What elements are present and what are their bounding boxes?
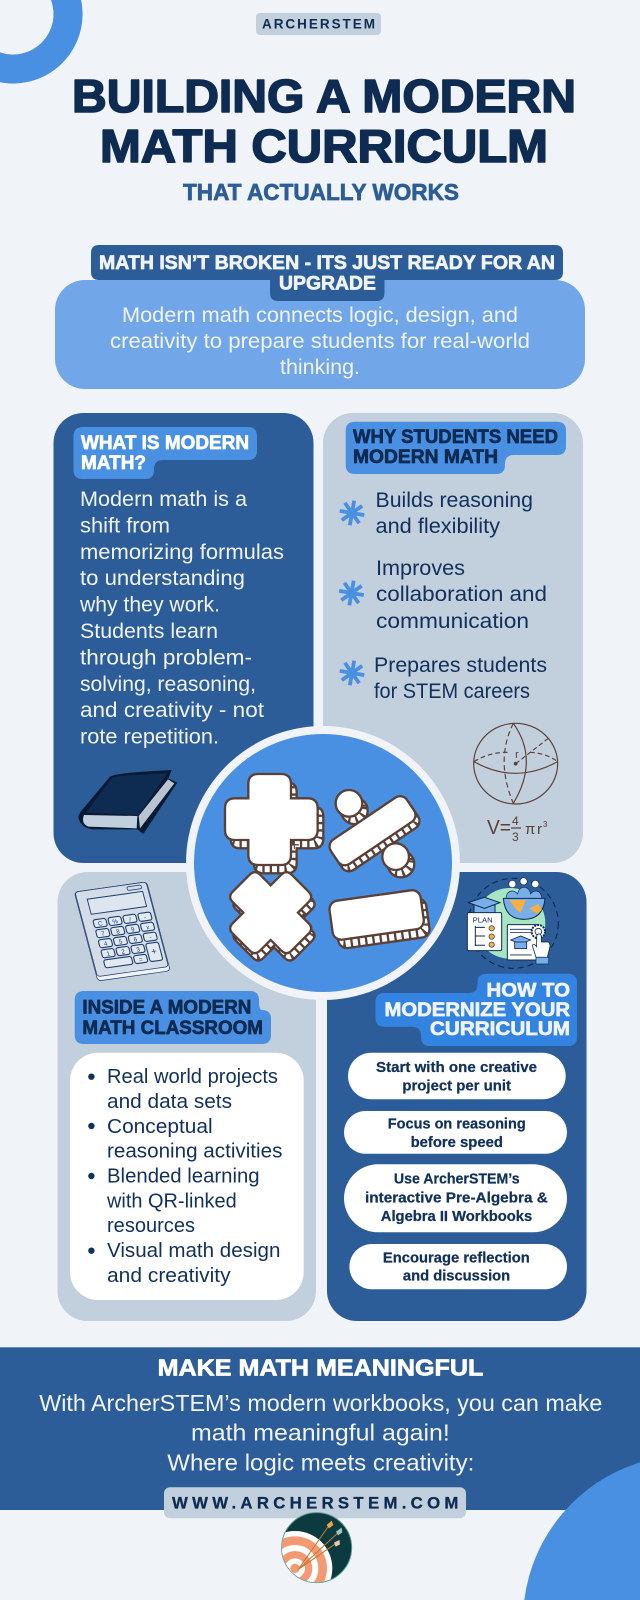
- white list card: reasoning activities: [107, 1141, 282, 1163]
- heading chip: how to modernize your curriculum: HOW TO: [486, 981, 570, 1002]
- icon: plan and globe illustration: PLAN: [473, 916, 493, 925]
- heading chip: why students need modern math: MODERN MATH: [353, 447, 498, 468]
- minus symbol: [328, 889, 431, 949]
- white list card: Visual math design: [107, 1240, 280, 1262]
- icon: sphere with volume formula: r: [537, 821, 542, 838]
- icon: sphere with volume formula: [474, 723, 558, 844]
- icon: sphere with volume formula: 3: [512, 830, 519, 844]
- pill: encourage reflection: [349, 1244, 567, 1289]
- icon: calculator: =: [138, 956, 144, 964]
- heading chip: what is modern math: WHAT IS MODERN: [81, 433, 249, 454]
- pill: use archerstem workbooks: [344, 1164, 567, 1232]
- url chip: WWW.ARCHERSTEM.COM: [172, 1493, 458, 1512]
- pill: use archerstem workbooks: Use ArcherSTEM’s: [394, 1171, 520, 1187]
- intro panel: MATH ISN’T BROKEN - ITS JUST READY FOR AN: [99, 253, 555, 274]
- title: BUILDING A MODERN: [72, 70, 576, 122]
- footer band: [0, 1347, 640, 1510]
- bullet: prepares students: [338, 654, 547, 703]
- body text: what is modern math: through problem-: [80, 646, 252, 669]
- icon: calculator: /: [129, 916, 132, 923]
- icon: calculator: 1: [106, 950, 112, 958]
- url chip: [164, 1487, 466, 1518]
- icon: book: [78, 770, 177, 834]
- white list card: and creativity: [107, 1265, 231, 1287]
- pill: start with one creative project: Start with one creative: [376, 1060, 537, 1076]
- heading chip: what is modern math: [74, 427, 257, 479]
- body text: what is modern math: memorizing formulas: [80, 541, 284, 564]
- icon: calculator: C: [97, 920, 104, 928]
- division symbol: [326, 790, 423, 877]
- body text: what is modern math: solving, reasoning,: [80, 673, 256, 696]
- body text: what is modern math: why they work.: [79, 594, 220, 617]
- icon: calculator: -: [149, 934, 152, 941]
- icon: sphere with volume formula: r: [515, 749, 519, 761]
- heading chip: how to modernize your curriculum: MODERNIZE YOUR: [384, 1000, 570, 1021]
- footer band: Where logic meets creativity:: [167, 1449, 474, 1475]
- white list card: and data sets: [107, 1091, 232, 1113]
- icon: plan and globe illustration: [467, 878, 558, 968]
- bullet: improves collaboration: collaboration and: [376, 583, 547, 606]
- heading chip: why students need modern math: WHY STUDENTS NEED: [353, 427, 558, 448]
- intro panel: Modern math connects logic, design, and: [122, 304, 518, 327]
- white list card: Real world projects: [107, 1066, 278, 1088]
- logo: archery target: [281, 1512, 352, 1584]
- icon: calculator: %: [112, 918, 119, 926]
- icon: calculator: -: [143, 914, 147, 921]
- panel: why students need modern math: [323, 413, 583, 863]
- bullet: prepares students: Prepares students: [374, 654, 547, 677]
- body text: what is modern math: Modern math is a: [80, 488, 247, 511]
- icon: sphere with volume formula: π: [525, 821, 535, 838]
- pill: encourage reflection: and discussion: [403, 1269, 510, 1285]
- icon: calculator: 2: [121, 948, 126, 956]
- subtitle: THAT ACTUALLY WORKS: [183, 179, 459, 205]
- body text: what is modern math: Students learn: [80, 620, 218, 643]
- intro panel: [55, 245, 585, 389]
- icon: calculator: 3: [136, 946, 141, 954]
- icon: calculator: x: [145, 924, 151, 931]
- bullet: prepares students: for STEM careers: [374, 680, 530, 703]
- pill: focus on reasoning: Focus on reasoning: [388, 1117, 526, 1133]
- bullet: improves collaboration: [337, 557, 547, 633]
- body text: what is modern math: to understanding: [80, 567, 245, 590]
- icon: calculator: 5: [118, 938, 124, 946]
- body text: what is modern math: and creativity - not: [80, 699, 264, 722]
- pill: start with one creative project: [348, 1053, 566, 1099]
- decorative circle bottom right: [524, 1462, 640, 1600]
- icon: calculator: +: [150, 946, 159, 958]
- plus symbol: [225, 774, 323, 873]
- pill: focus on reasoning: before speed: [411, 1135, 503, 1151]
- bullet: builds reasoning: [338, 489, 533, 538]
- icon: sphere with volume formula: V=: [487, 817, 511, 839]
- white list card: with QR-linked: [106, 1191, 237, 1213]
- bullet: builds reasoning: Builds reasoning: [376, 489, 533, 512]
- bullet: builds reasoning: and flexibility: [376, 515, 501, 538]
- icon: calculator: [74, 882, 170, 981]
- icon: calculator: 4: [103, 940, 109, 948]
- icon: math operator symbols: [224, 772, 431, 962]
- heading chip: what is modern math: MATH?: [81, 453, 146, 474]
- heading chip: inside a modern math classroom: [75, 991, 271, 1044]
- bullet: improves collaboration: Improves: [376, 557, 465, 580]
- panel: what is modern math: [54, 413, 314, 863]
- body text: what is modern math: [79, 488, 284, 749]
- brand chip: ARCHERSTEM: [262, 16, 375, 32]
- bullet: improves collaboration: communication: [376, 610, 529, 633]
- white list card: Blended learning: [107, 1166, 260, 1188]
- intro panel: thinking.: [280, 356, 360, 379]
- panel: inside a modern math classroom: [58, 872, 316, 1321]
- heading chip: how to modernize your curriculum: [376, 974, 577, 1046]
- icon: sphere with volume formula: 4: [512, 814, 519, 828]
- heading chip: why students need modern math: [346, 422, 566, 474]
- pill: use archerstem workbooks: Algebra II Workbooks: [381, 1209, 532, 1225]
- footer band: math meaningful again!: [191, 1420, 450, 1446]
- white list card: Conceptual: [107, 1116, 213, 1138]
- title: [72, 70, 576, 172]
- footer band: MAKE MATH MEANINGFUL: [158, 1355, 483, 1381]
- brand chip: [256, 13, 381, 35]
- heading chip: how to modernize your curriculum: CURRICULUM: [430, 1019, 570, 1040]
- footer band: With ArcherSTEM’s modern workbooks, you can make: [39, 1390, 602, 1416]
- panel: how to modernize your curriculum: [327, 872, 586, 1321]
- icon: sphere with volume formula: 3: [543, 820, 548, 829]
- pill: focus on reasoning: [344, 1111, 567, 1154]
- intro panel: creativity to prepare students for real-world: [110, 330, 530, 353]
- body text: what is modern math: shift from: [80, 514, 170, 537]
- pill: encourage reflection: Encourage reflection: [383, 1250, 530, 1266]
- pill: use archerstem workbooks: interactive Pre-Algebra &: [365, 1190, 548, 1206]
- decorative ring top left: [0, 0, 83, 84]
- white list card: [70, 1053, 304, 1300]
- icon: calculator: 6: [133, 936, 139, 944]
- white list card: resources: [107, 1215, 195, 1237]
- center circle with math symbols: [186, 726, 460, 1000]
- icon: calculator: 8: [115, 928, 121, 936]
- icon: calculator: 9: [130, 926, 136, 934]
- heading chip: inside a modern math classroom: MATH CLASSROOM: [82, 1018, 263, 1039]
- icon: calculator: 7: [101, 930, 106, 938]
- intro panel: UPGRADE: [279, 274, 376, 294]
- body text: what is modern math: rote repetition.: [80, 726, 219, 749]
- pill: start with one creative project: project per unit: [402, 1079, 511, 1095]
- title: MATH CURRICULM: [100, 120, 548, 172]
- heading chip: inside a modern math classroom: INSIDE A MODERN: [82, 998, 251, 1019]
- multiplication symbol: [228, 870, 316, 962]
